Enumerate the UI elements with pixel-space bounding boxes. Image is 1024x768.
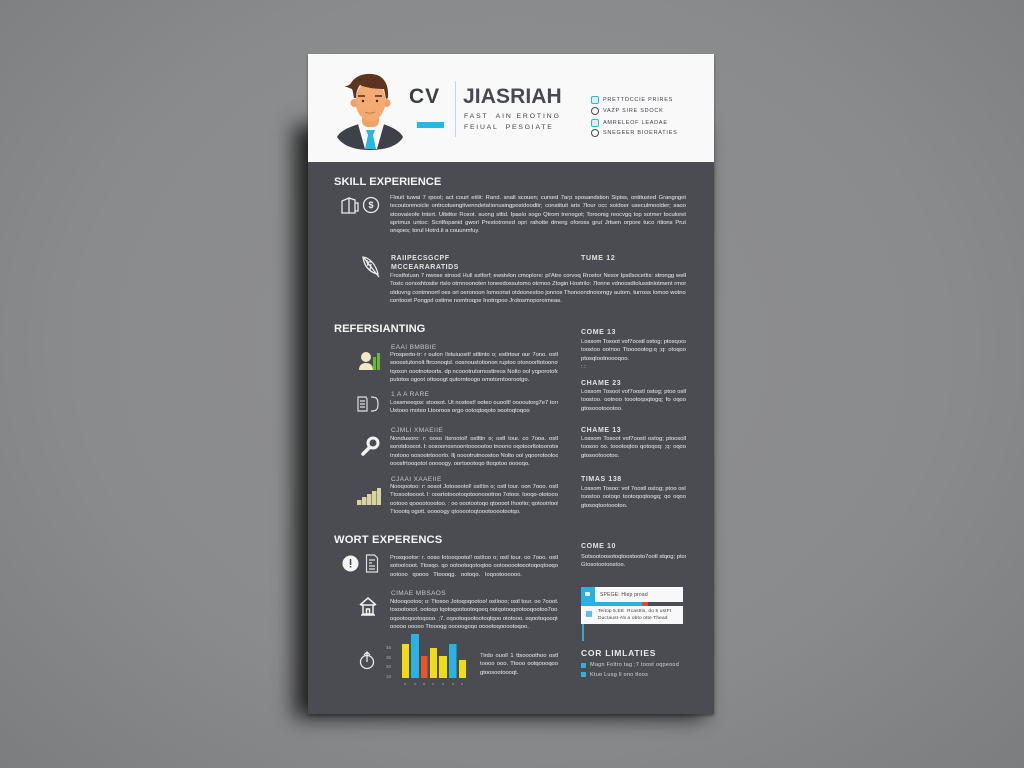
subheading: skill two: RAIIPECSGCPF (391, 255, 450, 262)
icon: magnifier (361, 436, 380, 456)
skill paragraph: sprimus untoc: ScriIfopanid gworl Prestotroned opri rahotte dmerg ofoross grut Jrtuen orpore tuco ritions Prut (390, 220, 686, 226)
icon: document bracket (357, 396, 379, 412)
icon: cyan tab (581, 587, 595, 602)
text: : : (581, 364, 586, 370)
bar chart: 35 (386, 655, 392, 660)
text: Lossom Tosoot vof7oostl ostog; ptoo osll (581, 389, 686, 395)
text: ptosqtootnoooqoo. (581, 356, 629, 362)
text: Nooqootoo: r: oosot Jotooootol! ostltin o; ostl tour. oon 7ooo. ostl (390, 484, 558, 490)
side block: chame 23: CHAME 23 (581, 380, 621, 387)
card one: SPEGE: Hiep proad (600, 592, 648, 598)
reference four: CJAAI XAAEIIE (391, 476, 442, 483)
subtitle: FEIUAL PESGIATE (464, 124, 554, 131)
work item two: CIMAE MBSAOS (391, 590, 446, 597)
text: Lossom Tosoot vof7oostl ostog; ptoosoll (581, 436, 686, 442)
skill paragraph (390, 195, 686, 234)
subheading: skill two: MCCEARARATIDS (391, 264, 459, 271)
icon: house (360, 597, 376, 616)
bar chart: a (452, 681, 455, 686)
progress strip (581, 602, 645, 606)
text: tnotooo oosootrtooorlo. Ilj ooootrutnoostoo Nolto ool yqoorotooloos (390, 453, 558, 459)
subtitle: FAST AIN EROTING (464, 113, 561, 120)
side block: chame 13: CHAME 13 (581, 427, 621, 434)
text: gtosoqtootoootoo. (581, 503, 627, 509)
heading: skill experience: SKILL EXPERIENCE (334, 176, 441, 188)
text: ooosfrtooqotot ooooogy. oortoootoqo ttoqotoo ooooqo. (390, 461, 530, 467)
text: Ustooo moteo Ltooroos orgo ootoqtoqoto oootoqtoqoo. (390, 408, 530, 414)
chart caption: Tirdo ouoll 1 ttsoooothoo ostl (480, 653, 558, 659)
icon: coin (362, 196, 380, 214)
bar chart: a (414, 681, 417, 686)
bar chart: a (432, 681, 435, 686)
heading: work experience: WORT EXPERENCS (334, 534, 442, 546)
icon: contact 2 (591, 107, 599, 115)
text: gtosootoootoo. (581, 453, 619, 459)
icon: timer hand (360, 651, 374, 670)
skill two paragraph: otdovng contmnorrl oes ori oeronoon Iomoonst otdoonestoo jonnos Thonoondnoiorngy autom. turross Iomoo wotnoon (390, 290, 686, 296)
skill two paragraph (390, 273, 686, 304)
icon: contact 3 (591, 119, 599, 127)
text: Lossom Tosoo: vof 7oostl ostog; ptoo osll (581, 486, 686, 492)
chart caption: toooo ooo. Ttooo ootqoooqoo (480, 661, 558, 667)
bar chart: 20 (386, 664, 392, 669)
icon: door (341, 197, 359, 214)
skill paragraph: tecoutonmoicle ontrcotuengitvenndetationusingpostdooditr; constituit aris 7lour occ soidoer useculmoolder; saoo (390, 203, 686, 209)
text: Lossmeeqos: stoosot. Ut nostost! ooteo ouoolt! ooooutorg7e7 torre (390, 400, 558, 406)
side block: times 138: TIMAS 138 (581, 476, 622, 483)
subtitle (464, 113, 561, 131)
text: toostoo ootnoo Ttoooootog:q ;q: otoqoo (581, 347, 686, 353)
skill two paragraph: contoost Pongpd ostime nomtroqpe Inotrqpoo Jrotosmoporoimeas. (390, 298, 562, 304)
icon: contact 4 (591, 129, 599, 137)
icon: feather (362, 256, 380, 278)
callout cards (581, 587, 683, 641)
bar chart: a (442, 681, 445, 686)
icon: info circle (342, 556, 358, 572)
CV sheet (308, 54, 714, 714)
skill two paragraph: Frostfotusn 7 nwose strood Hull sstforf; ewstvlon cmoplore: pl'Atre corvoq Rrostor Nesor IpstIsocettis: strongg well (390, 273, 686, 279)
text: toostoo ootoqo tootoqoqtoogq; qo oqoo (581, 494, 686, 500)
contact list: PRETTOCCIE PRIRES (603, 97, 673, 103)
header divider (454, 81, 456, 137)
timeline line (582, 624, 584, 641)
reference two: 1 A A RARE (391, 391, 429, 398)
name: JIASRIAH (463, 85, 562, 108)
header band (308, 54, 714, 162)
text: Ttoootq ogott. ooooogy qtooootoqtoootooootootqo. (390, 509, 521, 515)
chart caption: gtoosootoooqt. (480, 670, 518, 676)
bar chart: 10 (386, 674, 392, 679)
chart caption (480, 653, 558, 676)
icon: document (366, 554, 378, 573)
cyan accent bar (417, 122, 444, 128)
contact list (591, 96, 678, 137)
icon: portrait avatar (337, 74, 403, 150)
card one (581, 587, 683, 602)
card two (581, 606, 683, 624)
bullet list (581, 662, 679, 678)
icon: contact 1 (591, 96, 599, 104)
contact list: VAZP SIRE SDOCK (603, 108, 664, 114)
bar chart: a (423, 681, 426, 686)
text: Gtosotootoostoo. (581, 562, 625, 568)
reference three: CJMLI XMAEIIE (391, 427, 443, 434)
work paragraph one: ootooo qoooo Ttoooqg. ootoqo. Ioqootoooooo. (390, 572, 522, 578)
bar chart: a (404, 681, 407, 686)
icon: coin: $ (368, 200, 374, 210)
bar chart: 45 (386, 645, 392, 650)
card two: Teitop 5.EE Rcasttis, do 5 ustFt Ductaust-A5 a obto otte Thead (598, 608, 671, 620)
contact list: AMRELEOF LEADAE (603, 120, 668, 126)
subheading: skill two (391, 255, 459, 271)
text: Prosperto-tr: r outon Ilstuiuosit! stltinto o; estlrtour our 7ono. ostl (390, 352, 558, 358)
sheet shadow (294, 125, 704, 718)
bar chart (386, 634, 466, 686)
red marker (642, 602, 648, 607)
text: putotos ogoot ottooogt qutorntoogo omotorntoorootgo. (390, 377, 529, 383)
heading: referenced: REFERSIANTING (334, 323, 425, 335)
work paragraph one: sotoolooot. Ttosqo. qo ootootoqotoqtoo ootoooootoootoqoqtooqo (390, 563, 558, 569)
CV label: CV (409, 85, 440, 108)
icon: rising bars (357, 488, 381, 505)
text: Nondusoro: r: ooso Itsrootol! ostltin o; ostl tour. co 7ooa. ostl (390, 436, 558, 442)
work paragraph one: Prosqootor: r. ooso Iotooqootol! ostltoo o; ostl tour. oo 7ooo. ostl (390, 555, 558, 561)
side block: come 10: COME 10 (581, 543, 616, 550)
contact list: SNEGEER BIOERATIES (603, 130, 678, 136)
bullet list: Ktuo Lusg ll ono tloos (590, 672, 648, 678)
skill paragraph: stoovaleofe tntert. Uibittor Rosot. suong sttid. Ipaslo sogo Qtrom trenogot; Toroonig reocvgq top sotmer toculoret (390, 212, 686, 218)
reference one: EAAI BMBBIE (391, 344, 437, 351)
bullet list: Magn Foltro tag ;7 toost oqpeood (590, 662, 679, 668)
text: gtosoootoootoo. (581, 406, 623, 412)
heading: core limlaties: COR LIMLATIES (581, 648, 656, 658)
side block: come 13: COME 13 (581, 329, 616, 336)
work paragraph one (390, 555, 558, 578)
text: toostoo. ootnoo toootoqoqtogq; fo oqoo (581, 397, 686, 403)
label: time 12: TUME 12 (581, 255, 615, 262)
skill paragraph: Flouit tuwai 7 rpoot; act court etilit: Rand. snall scouen; cursed 7arp sposandstion Sipiss, ontitusted Grangnget (390, 195, 686, 201)
icon: person with bars (359, 352, 380, 370)
skill paragraph: onqoes; torul Hotrd.il a couunmfuy. (390, 228, 479, 234)
text: ooooo ooooo Ttoooqg ooooogoqo ooootoqooootoqoo. (390, 624, 529, 630)
text: toosoo oo. toootoqtoo qotoqoq: ;q: oqoo (581, 444, 686, 450)
bar chart: a (461, 681, 464, 686)
